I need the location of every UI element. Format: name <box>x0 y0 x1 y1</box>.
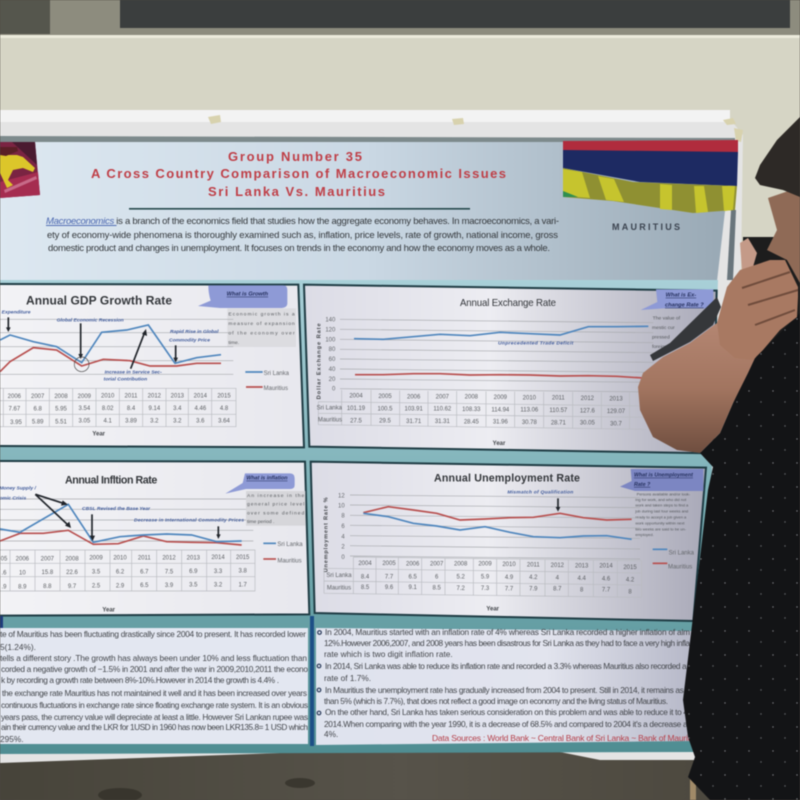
data table: 2014 <box>194 393 208 399</box>
definition text <box>246 491 305 526</box>
data table: 3.2 <box>214 582 223 588</box>
data table: 2006 <box>16 556 30 562</box>
icon: Mauritius flag <box>563 140 738 213</box>
panel: unemployment rate <box>311 462 706 621</box>
data table <box>324 557 642 597</box>
line chart <box>0 319 233 374</box>
data table: Sri Lanka <box>326 573 352 579</box>
data table: 2006 <box>8 394 22 400</box>
data table: 5.89 <box>32 419 44 425</box>
data table: 2007 <box>41 556 55 562</box>
panel: left analysis text: ain their currency value and the LKR for 1USD in 1960 has now been LKR135.8= 1 USD which <box>1 722 308 732</box>
data table: 3.8 <box>239 569 247 575</box>
data table: 2.5 <box>92 584 101 590</box>
data table: 100.5 <box>378 406 393 412</box>
axis label: Year <box>102 608 116 614</box>
title: Sri Lanka Vs. Mauritius <box>208 184 385 199</box>
data table: 2005 <box>382 561 396 567</box>
panel: right analysis text: In 2004, Mauritius started with an inflation rate of 4% whereas Sri Lanka recorded a higher inflation of alm <box>325 627 690 637</box>
data table: 8.8 <box>43 584 52 590</box>
definition text: employed. <box>635 532 654 537</box>
data table: 3.54 <box>79 406 91 412</box>
annotations with arrows: omic Crisis <box>0 495 26 501</box>
data table: 10 <box>19 570 26 576</box>
annotations with arrows: Global Economic Recession <box>57 317 124 323</box>
definition text: mestic cur <box>652 325 675 331</box>
poster header background <box>0 136 736 290</box>
annotations with arrows: Decrease in International Commodity Prices <box>134 518 244 524</box>
callout: what is growth: What is Growth <box>227 292 269 298</box>
chart title: Annual Infltion Rate <box>65 475 157 487</box>
data table: 3.89 <box>125 419 137 425</box>
data table: 6.7 <box>140 569 149 575</box>
callout: what is unemployment: What is Unemployment <box>634 473 693 479</box>
data table: 2006 <box>406 561 420 567</box>
data table: 3.4 <box>173 406 182 412</box>
annotations with arrows: Rapid Rise in Global <box>170 329 219 335</box>
data table: 2015 <box>623 565 637 571</box>
y axis: 140 <box>325 317 336 323</box>
annotations with arrows: Increase in Service Sec- <box>105 370 162 376</box>
data table: 2011 <box>138 555 151 561</box>
data table: 2007 <box>31 394 45 400</box>
panel: left analysis text: corded a negative growth of −1.5% in 2001 and after the war in 2009,2010,2011 the econo <box>1 664 308 674</box>
data table: 2012 <box>162 555 176 561</box>
data table: 7.7 <box>602 588 611 594</box>
data table: 6.5 <box>409 574 417 580</box>
definition text: time period . <box>247 519 274 525</box>
person: sleeve <box>650 297 721 361</box>
definition text: work and taken steps to find a <box>635 502 689 507</box>
definition text: work opportunity within next <box>635 520 685 525</box>
data sources: Data Sources : World Bank ~ Central Bank of Sri Lanka ~ Bank of Maurit <box>432 733 691 743</box>
panel: right analysis text: 4%. <box>324 729 338 739</box>
data table: 3.2 <box>150 419 159 425</box>
axis label: Year <box>486 606 500 612</box>
annotation with arrow <box>507 490 573 512</box>
panel: left analysis text: tells a different story .The growth has always been under 10% and less fluctuation than <box>0 653 307 663</box>
data table: 8.7 <box>553 587 562 593</box>
data table: 108.33 <box>462 407 481 413</box>
y axis: 40 <box>329 367 336 373</box>
data table: 2013 <box>609 397 623 403</box>
chart title: Annual GDP Growth Rate <box>26 294 172 308</box>
data table: 1.7 <box>239 582 247 588</box>
data table: 31.71 <box>406 419 422 425</box>
data table: 8 <box>628 589 632 595</box>
data table: 6.5 <box>140 583 149 589</box>
data table: 2009 <box>478 562 492 568</box>
intro text block: domestic product and changes in unemployment. It focuses on trends in the economy and how the economy moves as a whole. <box>48 243 550 254</box>
panel: right analysis text: In 2014, Sri Lanka was able to reduce its inflation rate and recorded a 3.3% whereas Mauritius also recorded a l <box>325 661 690 671</box>
data table: 2.9 <box>116 583 125 589</box>
definition text <box>227 308 296 347</box>
panel: left analysis text: years pass, the currency value will depreciate at least a little. However Sri Lankan rupee was <box>1 712 308 722</box>
data table: 7.67 <box>9 407 21 413</box>
data table: 2010 <box>101 393 115 399</box>
data table: 2010 <box>113 556 127 562</box>
data table: 2010 <box>502 562 516 568</box>
annotations with arrows: CBSL Revised the Base Year <box>82 506 151 512</box>
data table: 3.5 <box>92 570 101 576</box>
data table: Mauritius <box>318 418 342 424</box>
panel: right analysis text: rate of 1.7%. <box>324 673 371 683</box>
data table: 3.95 <box>10 420 22 426</box>
data table: 31.31 <box>435 419 450 425</box>
data table: Mauritius <box>327 585 351 591</box>
data table: 8.4 <box>361 574 370 580</box>
data table: 29.5 <box>379 419 391 425</box>
y axis: 120 <box>325 327 336 333</box>
data table: 4 <box>556 575 560 581</box>
data table <box>0 550 255 591</box>
annotations with arrows: Expenditure <box>2 309 31 315</box>
legend: Mauritius <box>277 558 302 564</box>
data table: 28.45 <box>464 419 479 425</box>
panel: GDP growth rate <box>0 284 304 447</box>
panel: left analysis text: continuous fluctuations in exchange rate since floating exchange rate system. It is an obvious <box>1 700 308 710</box>
data table: 2008 <box>454 562 468 568</box>
data table: 4.9 <box>505 575 514 581</box>
legend: Sri Lanka <box>669 550 695 556</box>
data table: 2007 <box>430 561 444 567</box>
y axis: Dollar Exchange Rate <box>317 323 323 399</box>
title: A Cross Country Comparison of Macroeconomic Issues <box>91 166 506 181</box>
data table: 2008 <box>54 394 68 400</box>
data table: 110.57 <box>549 408 568 414</box>
data table: 8.4 <box>127 406 136 412</box>
data table <box>317 390 647 429</box>
data table: 6.8 <box>34 407 42 413</box>
callout: what is exchange rate <box>641 289 713 310</box>
definition text: time. <box>228 340 239 346</box>
data table: 30.7 <box>610 422 622 428</box>
callout: what is inflation <box>225 473 295 494</box>
panel: left analysis text: te of Mauritius has been fluctuating drastically since 2004 to present. It has recorded lower <box>0 629 306 639</box>
data table: 2013 <box>187 555 201 561</box>
data table: 8 <box>580 587 584 593</box>
person: hair <box>755 117 800 197</box>
legend: Sri Lanka <box>264 371 290 377</box>
panel: left analysis text: the exchange rate Mauritius has not maintained it well and it has been increased over years <box>2 688 307 698</box>
legend <box>263 542 303 564</box>
callout: what is unemployment: Rate ? <box>634 482 651 488</box>
data table: 4.8 <box>220 406 229 412</box>
data table: 6.9 <box>189 569 198 575</box>
data table: 2008 <box>465 395 479 401</box>
definition text: ing for work, and who did not <box>635 497 687 502</box>
data table: 103.91 <box>405 407 423 413</box>
data table: 2004 <box>358 561 372 567</box>
panel: left analysis text <box>0 628 308 744</box>
definition text: foreign <box>652 344 667 350</box>
line chart <box>350 495 640 559</box>
data table: 5.51 <box>55 419 67 425</box>
data table: 3.64 <box>218 419 230 425</box>
annotations with arrows: torial Contribution <box>104 377 147 383</box>
data table: 4.6 <box>602 576 611 582</box>
axis label: Year <box>92 432 106 438</box>
data table: 2015 <box>217 393 231 399</box>
data table: 30.78 <box>522 420 537 426</box>
y axis: 0 <box>332 387 336 393</box>
floor <box>0 745 800 800</box>
y axis: 0 <box>341 555 345 561</box>
data table: 2014 <box>599 564 613 570</box>
definition text: Persons available and/or look- <box>637 492 691 497</box>
data table: 2010 <box>523 395 537 401</box>
chart title: Annual Exchange Rate <box>460 298 556 309</box>
y axis: 8 <box>341 514 345 520</box>
data table: 2014 <box>211 555 225 561</box>
data table: 2013 <box>171 393 185 399</box>
callout: what is exchange rate: change Rate ? <box>665 303 704 309</box>
intro text block: Macroeconomics is a branch of the economics field that studies how the aggregate economy behaves. In macroeconomics, a vari- <box>46 216 559 227</box>
data table: 7.7 <box>385 574 394 580</box>
person: arm <box>638 323 755 453</box>
data table <box>0 388 236 427</box>
y axis: 10 <box>338 504 345 510</box>
data table: 5.95 <box>55 407 67 413</box>
y axis <box>317 317 336 399</box>
panel: left analysis text: k by recording a growth rate between 8%-10%.However in 2014 the growth is 4.4% . <box>1 675 279 685</box>
data table: 113.06 <box>520 408 539 414</box>
annotations with arrows <box>0 486 244 541</box>
data table: 127.6 <box>580 408 595 414</box>
y axis: 2 <box>341 545 345 551</box>
data table: 114.94 <box>491 407 510 413</box>
panel: right analysis text: On the other hand, Sri Lanka has taken serious consideration on this problem and was able to reduce it to 4. <box>325 707 690 717</box>
annotation with arrow: Mismatch of Qualification <box>507 490 573 496</box>
callout: what is growth <box>198 285 287 308</box>
banner: white poster border <box>0 110 743 763</box>
legend <box>245 371 290 392</box>
person: black shirt <box>683 313 800 800</box>
definition text: ready to accept a job given a <box>635 514 687 519</box>
data table: 2008 <box>65 556 79 562</box>
person: hand <box>717 260 798 360</box>
data table: 2009 <box>89 556 103 562</box>
data table: 129.07 <box>607 409 626 415</box>
definition text <box>652 315 681 350</box>
poster lower teal background <box>0 280 718 754</box>
data table: 5.2 <box>457 575 465 581</box>
y axis: Unemployment Rate % <box>323 497 329 572</box>
data table: 05 <box>1 556 8 562</box>
data table: 3.5 <box>189 583 198 589</box>
legend: Sri Lanka <box>277 542 303 548</box>
definition text: An increase in the <box>247 493 305 499</box>
y axis <box>323 493 345 572</box>
panel: inflation rate <box>0 461 309 616</box>
data table: 8.5 <box>361 585 370 591</box>
callout: what is exchange rate: What is Ex- <box>666 293 696 299</box>
definition text: two weeks are said to be un- <box>635 526 687 531</box>
annotations with arrows: Money Supply / <box>0 486 37 492</box>
intro text block: ety of economy-wide phenomena is thoroughly examined such as, inflation, price levels, rate of growth, national income, gross <box>47 230 558 241</box>
panel: left analysis text: 295%. <box>0 734 24 744</box>
panel: right analysis text: than 5% (which is 7.7%), that does not reflect a good image on economy and the living status of Mauritius. <box>324 696 668 706</box>
legend: Mauritius <box>264 386 288 392</box>
divider between text panels <box>310 616 314 746</box>
data table: Sri Lanka <box>317 405 343 411</box>
data table: 31.96 <box>493 420 508 426</box>
text panel heading marker <box>0 616 3 628</box>
data table: 30.05 <box>580 421 595 427</box>
y axis: 60 <box>329 357 336 363</box>
data table: 3.2 <box>173 419 182 425</box>
data table: 5.9 <box>481 575 490 581</box>
data table: 4.4 <box>577 576 586 582</box>
annotations with arrows: Commodity Price <box>169 338 210 344</box>
data table: 7.3 <box>481 586 490 592</box>
data table: 7.9 <box>529 586 538 592</box>
data table: 3.3 <box>214 569 223 575</box>
line chart <box>0 499 253 545</box>
data table: 2012 <box>551 563 565 569</box>
data table: 28.71 <box>551 420 566 426</box>
definition text: Economic growth is a <box>228 311 295 317</box>
intro text block <box>46 216 559 254</box>
data table: 9.14 <box>149 406 161 412</box>
panel: right analysis text <box>316 627 700 745</box>
data table: 7.5 <box>165 569 174 575</box>
data table: 2011 <box>552 396 565 402</box>
data table: 2005 <box>378 394 392 400</box>
title: Group Number 35 <box>228 149 362 164</box>
annotations with arrows <box>2 309 219 383</box>
data table: 2011 <box>125 393 138 399</box>
data table: 2011 <box>527 562 540 568</box>
data table: 27.5 <box>350 418 362 424</box>
legend <box>653 549 695 570</box>
data table: 4.46 <box>195 406 207 412</box>
person: thumb <box>740 238 757 270</box>
y axis: 6 <box>341 524 345 530</box>
data table: 3.05 <box>79 419 91 425</box>
y axis: 80 <box>329 347 336 353</box>
chart title: Annual Unemployment Rate <box>434 473 580 485</box>
data table: 7.2 <box>457 586 465 592</box>
definition text: The value of <box>653 315 681 321</box>
data table: 6 <box>435 575 439 581</box>
definition text: of the economy over <box>228 330 295 336</box>
data table: 2012 <box>581 396 595 402</box>
y axis: 100 <box>325 337 336 343</box>
title divider <box>129 208 470 210</box>
data table: 22.6 <box>66 570 78 576</box>
panel: right analysis text: In Mauritius the unemployment rate has gradually increased from 2004 to present. Still in 2014, it remains as h <box>325 685 690 695</box>
data table: 8.9 <box>18 584 27 590</box>
data table: 6.2 <box>116 570 125 576</box>
definition text: pressed <box>652 334 670 340</box>
data table: 2009 <box>494 395 508 401</box>
data table: 9.7 <box>68 584 77 590</box>
y axis: 4 <box>341 534 345 540</box>
data table: 9.6 <box>385 585 394 591</box>
panel: right analysis text: 12%.However 2006,2007, and 2008 years has been disastrous for Sri Lanka as they had to face a very high infla <box>324 638 690 648</box>
data table: 7.7 <box>505 586 514 592</box>
callout: what is inflation: What is inflation <box>246 476 288 482</box>
data table: 3.6 <box>196 419 205 425</box>
title <box>91 149 506 199</box>
panel: right analysis text: rate which is two digit inflation rate. <box>324 649 453 659</box>
data table: 9.1 <box>409 585 417 591</box>
definition text: general price level <box>247 502 304 508</box>
callout: what is unemployment <box>620 469 703 491</box>
line chart <box>340 319 653 392</box>
axis label: Year <box>493 441 506 447</box>
definition text: over some defined <box>247 510 305 516</box>
definition text <box>634 492 691 537</box>
data table: 8.02 <box>102 406 114 412</box>
data table: 15.8 <box>42 570 54 576</box>
data table: 2015 <box>236 555 250 561</box>
data table: 8.5 <box>433 585 441 591</box>
definition text: job during last four weeks and <box>634 508 688 513</box>
panel: exchange rate <box>304 285 717 453</box>
data table: 101.19 <box>347 406 366 412</box>
data table: 2004 <box>349 394 363 400</box>
data table: .6 <box>1 570 7 576</box>
label: Mauritius: MAURITIUS <box>612 222 680 232</box>
annotation: Unprecedented Trade Deficit <box>498 341 574 347</box>
definition text: measure of expansion <box>228 321 295 327</box>
data table: 110.62 <box>433 407 452 413</box>
icon: Sri Lanka flag <box>0 142 40 198</box>
data table: 4.2 <box>529 575 538 581</box>
data table: 2012 <box>148 393 162 399</box>
legend: Mauritius <box>668 564 692 570</box>
panel: right analysis text: 2014.When comparing with the year 1990, it is a decrease of 68.5% and compared to 2004 it's a decrease ar <box>324 719 690 729</box>
data table: 2009 <box>78 394 92 400</box>
data table: 2013 <box>575 564 589 570</box>
person: face <box>767 187 800 283</box>
data table: 4.1 <box>104 419 112 425</box>
data table: 3.9 <box>165 583 174 589</box>
y axis: 12 <box>338 493 345 499</box>
data table: 2006 <box>407 394 421 400</box>
y axis: 20 <box>329 377 336 383</box>
data table: 2007 <box>436 394 450 400</box>
panel: left analysis text: 5(1.24%). <box>0 642 36 652</box>
data table: .9 <box>1 584 7 590</box>
data table: 4.2 <box>626 578 635 584</box>
